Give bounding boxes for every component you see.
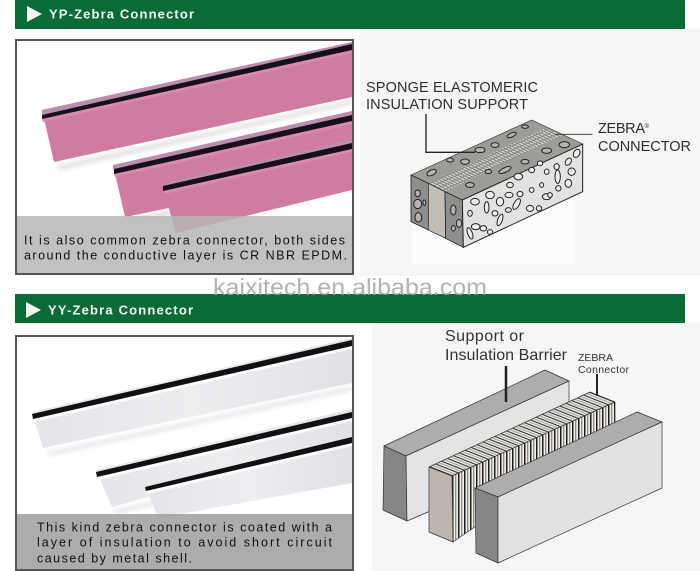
foam bubbles [466, 148, 581, 240]
rear barrier [383, 370, 569, 521]
label: zebra connector: ZEBRA [598, 121, 645, 137]
diagram: insulation barriers with zebra connector [383, 370, 662, 563]
banner: YP-Zebra Connector [15, 0, 685, 29]
zebra connector stack [429, 392, 615, 542]
label: support or insulation barrier: Support or [445, 328, 525, 345]
label: zebra connector small: ZEBRA [578, 352, 613, 364]
caption text YY: layer of insulation to avoid short circuit [37, 536, 333, 550]
bubbles on top faces and ends [414, 125, 570, 231]
photo: pink connector strips [42, 42, 352, 233]
leader line: barrier [505, 366, 507, 402]
label: zebra connector: ® [645, 123, 650, 130]
panel: YP photo with caption [16, 40, 353, 274]
connector top stripes [428, 128, 562, 192]
left foam end [411, 175, 428, 230]
label: sponge elastomeric: INSULATION SUPPORT [366, 97, 528, 113]
diagram: sponge block with zebra connector [411, 114, 592, 264]
label: sponge elastomeric: SPONGE ELASTOMERIC [366, 80, 538, 96]
caption band YY [17, 514, 352, 569]
connector end [428, 183, 446, 238]
photo: silver connector strips [32, 338, 352, 518]
front barrier [475, 412, 662, 563]
label: zebra connector: CONNECTOR [598, 139, 691, 155]
caption text YP: It is also common zebra connector, both sides [24, 234, 345, 248]
label: support or insulation barrier: Insulation Barrier [445, 347, 568, 364]
top face [411, 120, 583, 200]
leader line: connector [596, 374, 598, 396]
heading: YY-Zebra Connector: YY-Zebra Connector [48, 302, 193, 318]
leader line: zebra [555, 133, 592, 136]
caption text YY: caused by metal shell. [37, 552, 192, 566]
panel: YY photo with caption [16, 336, 353, 570]
foam front [462, 144, 583, 247]
caption band YP [17, 216, 352, 273]
panel: YP diagram background [360, 29, 700, 276]
caption text YP: around the conductive layer is CR NBR EPDM. [24, 248, 347, 262]
leader line: sponge [426, 114, 475, 152]
banner: YY-Zebra Connector [15, 294, 685, 323]
watermark: kaixitech.en.alibaba.com [213, 274, 487, 300]
caption text YY: This kind zebra connector is coated with a [37, 520, 332, 534]
right foam end [445, 192, 463, 247]
panel: YY diagram background [372, 323, 700, 571]
heading: YP-Zebra Connector: YP-Zebra Connector [49, 6, 194, 22]
icon: banner arrow YY [26, 302, 41, 318]
label: zebra connector small: Connector [578, 364, 630, 376]
icon: banner arrow YP [27, 6, 42, 22]
